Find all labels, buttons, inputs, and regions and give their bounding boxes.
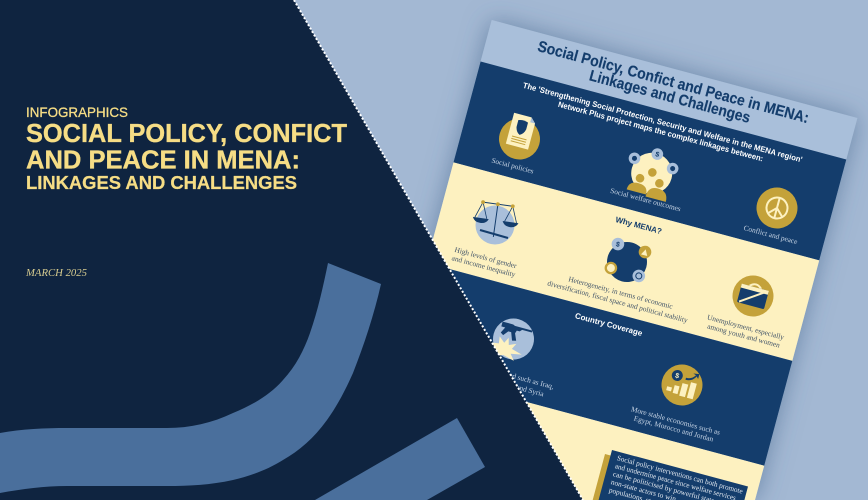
icon: unemployment — [728, 271, 778, 321]
callout text: Social policy interventions can both promote — [616, 453, 745, 496]
panel: infographic sheet — [363, 20, 857, 500]
band: cream lower band — [363, 368, 764, 500]
callout background — [599, 450, 748, 500]
icon: social policies — [494, 111, 546, 164]
decorative curve: lower band — [315, 418, 485, 500]
cover text block — [25, 104, 347, 279]
label: conflict and peace: Conflict and peace — [743, 223, 799, 246]
heading: country coverage: Country Coverage — [574, 311, 644, 338]
main title — [26, 120, 347, 174]
icon: social welfare outcomes: $ — [654, 151, 660, 159]
main title: SOCIAL POLICY, CONFICT — [26, 120, 347, 148]
label: social welfare outcomes: Social welfare outcomes — [609, 186, 682, 213]
sheet intro text: Network Plus project maps the complex linkages between: — [557, 100, 764, 163]
label: heterogeneity: diversification, fiscal space and political stability — [546, 278, 689, 325]
band: dark country coverage band — [398, 263, 792, 466]
label: heterogeneity: Heterogeneity, in terms of economic — [567, 274, 675, 311]
dotted diagonal edge — [294, 0, 583, 500]
sheet intro text: The 'Strengthening Social Protection, Security and Welfare in the MENA region' — [522, 81, 803, 164]
icon: heterogeneity: $ — [615, 241, 621, 249]
label: stable economies: More stable economies such as — [630, 404, 721, 437]
panel: dark navy cover — [0, 0, 583, 500]
callout box — [593, 450, 748, 500]
icon: conflict and peace — [752, 183, 802, 233]
label: inequality: High levels of gender — [454, 245, 518, 270]
kicker: INFOGRAPHICS — [26, 104, 128, 120]
band: dark intro band — [454, 62, 846, 260]
decorative curve: upper band — [0, 263, 381, 493]
icon: conflict-affected countries — [488, 314, 539, 365]
icon: heterogeneity — [602, 236, 653, 287]
label: stable economies: Egypt, Morocco and Jordan — [633, 414, 715, 444]
date: MARCH 2025 — [25, 267, 87, 279]
label: inequality: and income inequality — [451, 253, 517, 279]
icon: stable economies: $ — [674, 373, 680, 380]
sheet title: Linkages and Challenges — [587, 67, 752, 127]
callout gold accent — [593, 454, 640, 500]
band: cream why MENA band — [427, 162, 819, 361]
main title: AND PEACE IN MENA: — [26, 146, 300, 174]
icon: social welfare outcomes — [620, 142, 682, 203]
label: unemployment: among youth and women — [706, 322, 781, 350]
label: conflict-affected countries: Lebanon, Libya and Syria — [468, 370, 546, 399]
icon: stable economies — [657, 360, 707, 410]
icon: scales — [471, 199, 521, 244]
label: social policies: Social policies — [491, 156, 535, 176]
sheet base with shadow — [363, 20, 857, 500]
heading: why MENA: Why MENA? — [615, 215, 663, 236]
subtitle: LINKAGES AND CHALLENGES — [26, 172, 297, 193]
label: unemployment: Unemployment, especially — [706, 312, 785, 342]
sheet title: Social Policy, Confict and Peace in MENA: — [536, 38, 811, 127]
label: conflict-affected countries: Conflict-affected such as Iraq, — [466, 359, 555, 391]
